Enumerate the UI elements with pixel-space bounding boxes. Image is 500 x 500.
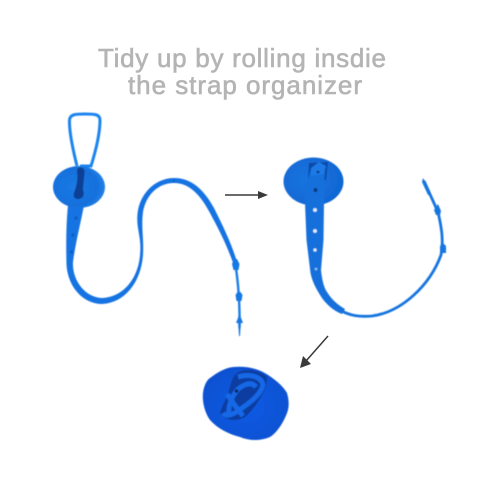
strap holes xyxy=(70,180,175,254)
title: Tidy up by rolling insdie xyxy=(98,43,386,73)
wide strap and long tail xyxy=(66,178,237,304)
rolled holder body xyxy=(203,367,289,440)
round holder xyxy=(53,166,105,208)
strap tail to tip xyxy=(235,262,240,328)
holder slot xyxy=(74,168,85,199)
holder pocket xyxy=(220,370,267,420)
title: the strap organizer xyxy=(128,70,362,100)
strap tail xyxy=(340,181,442,316)
strap organizer, rolled up xyxy=(203,367,289,440)
strap organizer, unrolled with loop xyxy=(53,114,243,336)
strap flap at top xyxy=(311,162,326,176)
strap organizer, strap threaded through holder xyxy=(284,158,446,316)
holder opening xyxy=(308,162,328,180)
strap holes xyxy=(313,208,317,270)
strap loop xyxy=(69,114,100,166)
title xyxy=(98,43,386,100)
arrow: first to second step xyxy=(225,191,268,199)
arrow: second to third step xyxy=(300,336,328,368)
round holder xyxy=(284,158,344,206)
strap knobs and tip xyxy=(422,178,446,253)
wide strap xyxy=(305,169,345,314)
rolled strap inside pocket xyxy=(223,375,263,416)
strap knobs and tip xyxy=(232,259,243,336)
